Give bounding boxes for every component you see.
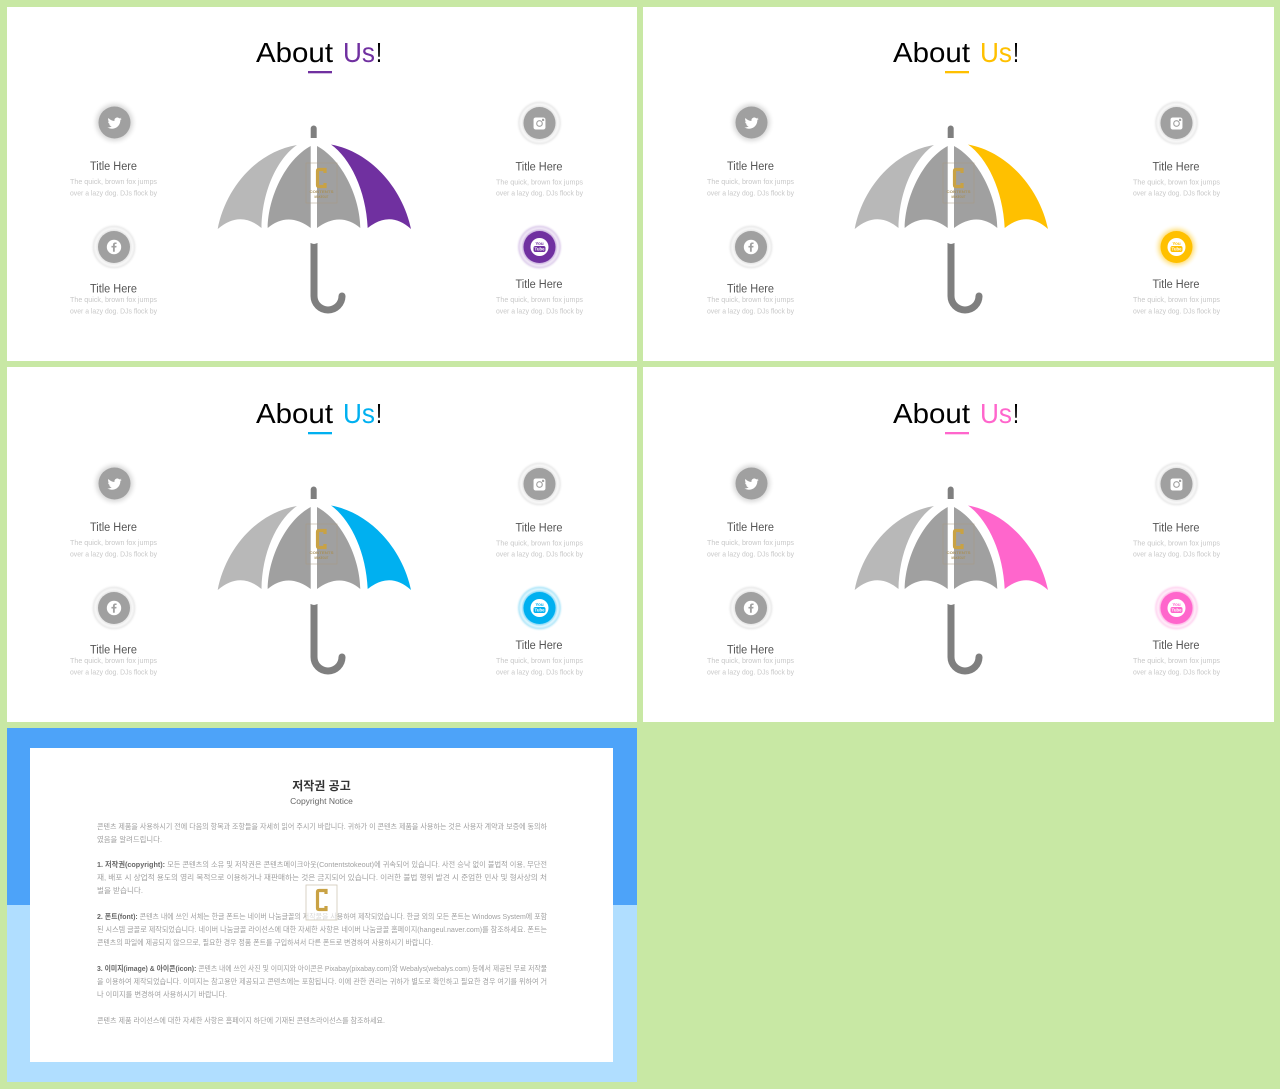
- text block: font clause: 2. 폰트(font): 콘텐츠 내에 쓰인 서체는 한글 폰트는 네이버 나눔글꼴의 저작물을 사용하여 제작되었습니다. 한글 외의 모든 폰트는 Windows System에 포함: [97, 911, 547, 921]
- heading: About Us blue: Us: [343, 398, 375, 429]
- item: youtube yellow: Title Here: [1152, 279, 1200, 291]
- item: facebook: The quick, brown fox jumps: [70, 295, 157, 304]
- text block: introduction: 였음을 알려드립니다.: [97, 834, 162, 844]
- heading: About Us yellow: About: [893, 37, 970, 68]
- text block: image and icon clause: [97, 963, 547, 999]
- text block: copyright clause: [97, 859, 547, 895]
- heading: About Us pink: !: [1013, 398, 1019, 429]
- item: youtube purple: You: [535, 241, 544, 246]
- panel: yellow about us: [643, 7, 1274, 361]
- item: youtube pink: You: [1172, 602, 1181, 607]
- item: instagram: Title Here: [516, 522, 562, 534]
- item: facebook: The quick, brown fox jumps: [707, 656, 794, 665]
- heading: About Us blue: !: [376, 398, 382, 429]
- text block: introduction: [97, 821, 547, 844]
- item: facebook: [70, 584, 157, 676]
- text block: copyright clause: 1. 저작권(copyright): 모든 콘텐츠의 소유 및 저작권은 콘텐츠메이크아웃(Contentstokeout)에 귀속되어 있습니다. 사전 승낙 없이 불법적 이용, 무단전: [97, 859, 547, 869]
- item: youtube blue: over a lazy dog. DJs flock by: [496, 668, 583, 676]
- heading: About Us blue: [256, 398, 382, 434]
- item: instagram: over a lazy dog. DJs flock by: [1133, 188, 1220, 198]
- item: youtube blue: The quick, brown fox jumps: [496, 656, 583, 665]
- item: facebook: Title Here: [727, 644, 774, 656]
- panel: blue about us: [7, 367, 637, 722]
- item: instagram: Title Here: [1152, 522, 1200, 534]
- heading: copyright notice: Copyright Notice: [290, 796, 353, 806]
- item: twitter: [707, 99, 794, 198]
- item: youtube yellow: The quick, brown fox jumps: [1133, 295, 1220, 304]
- item: youtube pink: Tube: [1172, 608, 1182, 613]
- item: instagram: Title Here: [516, 162, 562, 174]
- item: facebook: The quick, brown fox jumps: [70, 656, 157, 665]
- heading: About Us pink: Us: [980, 398, 1012, 429]
- heading: About Us yellow: [893, 37, 1019, 73]
- heading: About Us pink: About: [893, 398, 970, 429]
- item: twitter: [70, 99, 157, 198]
- item: twitter: The quick, brown fox jumps: [707, 177, 794, 186]
- item: twitter: The quick, brown fox jumps: [707, 538, 794, 547]
- text block: font clause: [97, 911, 547, 947]
- item: youtube pink: [1133, 584, 1220, 676]
- panel: copyright notice: [7, 728, 637, 1082]
- text block: introduction: 콘텐츠 제품을 사용하시기 전에 다음의 항목과 조항들을 자세히 읽어 주시기 바랍니다. 귀하가 이 콘텐츠 제품을 사용하는 것은 사용자 계약과 보증에 동의하: [97, 821, 547, 831]
- item: twitter: over a lazy dog. DJs flock by: [70, 550, 157, 558]
- text block: image and icon clause: 3. 이미지(image) & 아이콘(icon): 콘텐츠 내에 쓰인 사진 및 이미지와 아이콘은 Pixabay(pixabay.com)와 Webalys(webalys.com) 등에서 제공된 무료 저작물: [97, 963, 547, 973]
- item: twitter: Title Here: [90, 522, 137, 534]
- heading: About Us blue: About: [256, 398, 333, 429]
- item: youtube blue: You: [535, 602, 544, 607]
- item: twitter: over a lazy dog. DJs flock by: [70, 188, 157, 198]
- heading: About Us purple: [256, 37, 382, 73]
- heading: About Us yellow: !: [1013, 37, 1019, 68]
- item: youtube blue: Title Here: [516, 640, 562, 652]
- umbrella purple: [218, 126, 411, 310]
- text block: licence note: 콘텐츠 제품 라이선스에 대한 자세한 사항은 홈페이지 하단에 기재된 콘텐츠라이선스를 참조하세요.: [97, 1015, 385, 1025]
- text block: copyright clause: 벌을 받습니다.: [97, 885, 143, 895]
- item: twitter: The quick, brown fox jumps: [70, 538, 157, 547]
- item: twitter: over a lazy dog. DJs flock by: [707, 550, 794, 558]
- item: facebook: The quick, brown fox jumps: [707, 295, 794, 304]
- item: facebook: over a lazy dog. DJs flock by: [707, 306, 794, 316]
- heading: About Us pink: [893, 398, 1019, 434]
- item: facebook: over a lazy dog. DJs flock by: [707, 668, 794, 676]
- item: facebook: [707, 584, 794, 676]
- icon: watermark logo: [306, 885, 337, 920]
- item: youtube purple: The quick, brown fox jumps: [496, 295, 583, 304]
- item: twitter: Title Here: [727, 522, 774, 534]
- item: twitter: Title Here: [90, 161, 137, 173]
- umbrella pink: [855, 486, 1048, 671]
- item: instagram: [496, 460, 583, 558]
- item: instagram: The quick, brown fox jumps: [1133, 538, 1220, 548]
- item: youtube yellow: over a lazy dog. DJs flock by: [1133, 306, 1220, 316]
- heading: About Us purple: Us: [343, 37, 375, 68]
- panel: purple about us: [7, 7, 637, 361]
- item: instagram: Title Here: [1152, 162, 1200, 174]
- item: instagram: [496, 100, 583, 198]
- item: instagram: [1133, 100, 1220, 198]
- item: youtube purple: over a lazy dog. DJs flock by: [496, 306, 583, 316]
- text block: image and icon clause: 나 이미지를 변경하여 사용하시기 바랍니다.: [97, 989, 227, 999]
- heading: copyright notice: [290, 778, 353, 806]
- item: youtube yellow: You: [1172, 241, 1181, 246]
- text block: image and icon clause: 을 이용하여 제작되었습니다. 이미지는 참고용만 제공되고 콘텐츠에는 포함됩니다. 이에 관한 권리는 귀하가 별도로 확인하고 필요한 경우 여기를 위하여 거: [97, 976, 547, 986]
- item: youtube purple: Title Here: [516, 279, 562, 291]
- item: instagram: [1133, 460, 1220, 558]
- item: youtube purple: Tube: [534, 247, 545, 252]
- item: youtube pink: over a lazy dog. DJs flock by: [1133, 668, 1220, 676]
- item: youtube blue: Tube: [534, 608, 545, 613]
- item: facebook: [707, 224, 794, 316]
- item: facebook: Title Here: [90, 284, 137, 296]
- item: instagram: over a lazy dog. DJs flock by: [496, 188, 583, 198]
- item: youtube yellow: [1133, 224, 1220, 316]
- item: instagram: over a lazy dog. DJs flock by: [496, 550, 583, 558]
- item: twitter: The quick, brown fox jumps: [70, 177, 157, 186]
- item: facebook: Title Here: [727, 284, 774, 296]
- item: twitter: [70, 460, 157, 558]
- item: facebook: [70, 224, 157, 316]
- heading: About Us purple: !: [376, 37, 382, 68]
- heading: copyright notice: 저작권 공고: [292, 778, 351, 793]
- umbrella yellow: [855, 126, 1048, 310]
- heading: About Us purple: About: [256, 37, 333, 68]
- item: instagram: The quick, brown fox jumps: [496, 538, 583, 548]
- item: youtube pink: The quick, brown fox jumps: [1133, 656, 1220, 665]
- item: instagram: The quick, brown fox jumps: [496, 178, 583, 186]
- text block: font clause: 된 시스템 글꼴로 제작되었습니다. 네이버 나눔글꼴 라이선스에 대한 자세한 사항은 네이버 나눔글꼴 홈페이지(hangeul.naver.com)를 참조하세요. 폰트는: [97, 924, 547, 934]
- item: youtube yellow: Tube: [1172, 247, 1182, 252]
- item: twitter: over a lazy dog. DJs flock by: [707, 188, 794, 198]
- panel: pink about us: [643, 367, 1274, 722]
- item: instagram: The quick, brown fox jumps: [1133, 178, 1220, 186]
- item: facebook: Title Here: [90, 644, 137, 656]
- item: facebook: over a lazy dog. DJs flock by: [70, 306, 157, 316]
- text block: font clause: 콘텐츠의 파일에 제공되지 않으므로, 필요한 경우 정품 폰트를 구입하셔서 다른 폰트로 변경하여 사용하시기 바랍니다.: [97, 937, 433, 947]
- heading: About Us yellow: Us: [980, 37, 1012, 68]
- item: youtube pink: Title Here: [1152, 640, 1200, 652]
- item: instagram: over a lazy dog. DJs flock by: [1133, 550, 1220, 558]
- item: youtube blue: [496, 584, 583, 676]
- item: facebook: over a lazy dog. DJs flock by: [70, 668, 157, 676]
- item: twitter: Title Here: [727, 161, 774, 173]
- item: twitter: [707, 460, 794, 558]
- text block: copyright clause: 재, 배포 시 상업적 용도의 영리 목적으로 이용하거나 재판매하는 것은 금지되어 있습니다. 이러한 불법 행위 발견 시 준엄한 민사 및 형사상의 처: [97, 872, 547, 882]
- item: youtube purple: [496, 224, 583, 316]
- umbrella blue: [218, 486, 411, 671]
